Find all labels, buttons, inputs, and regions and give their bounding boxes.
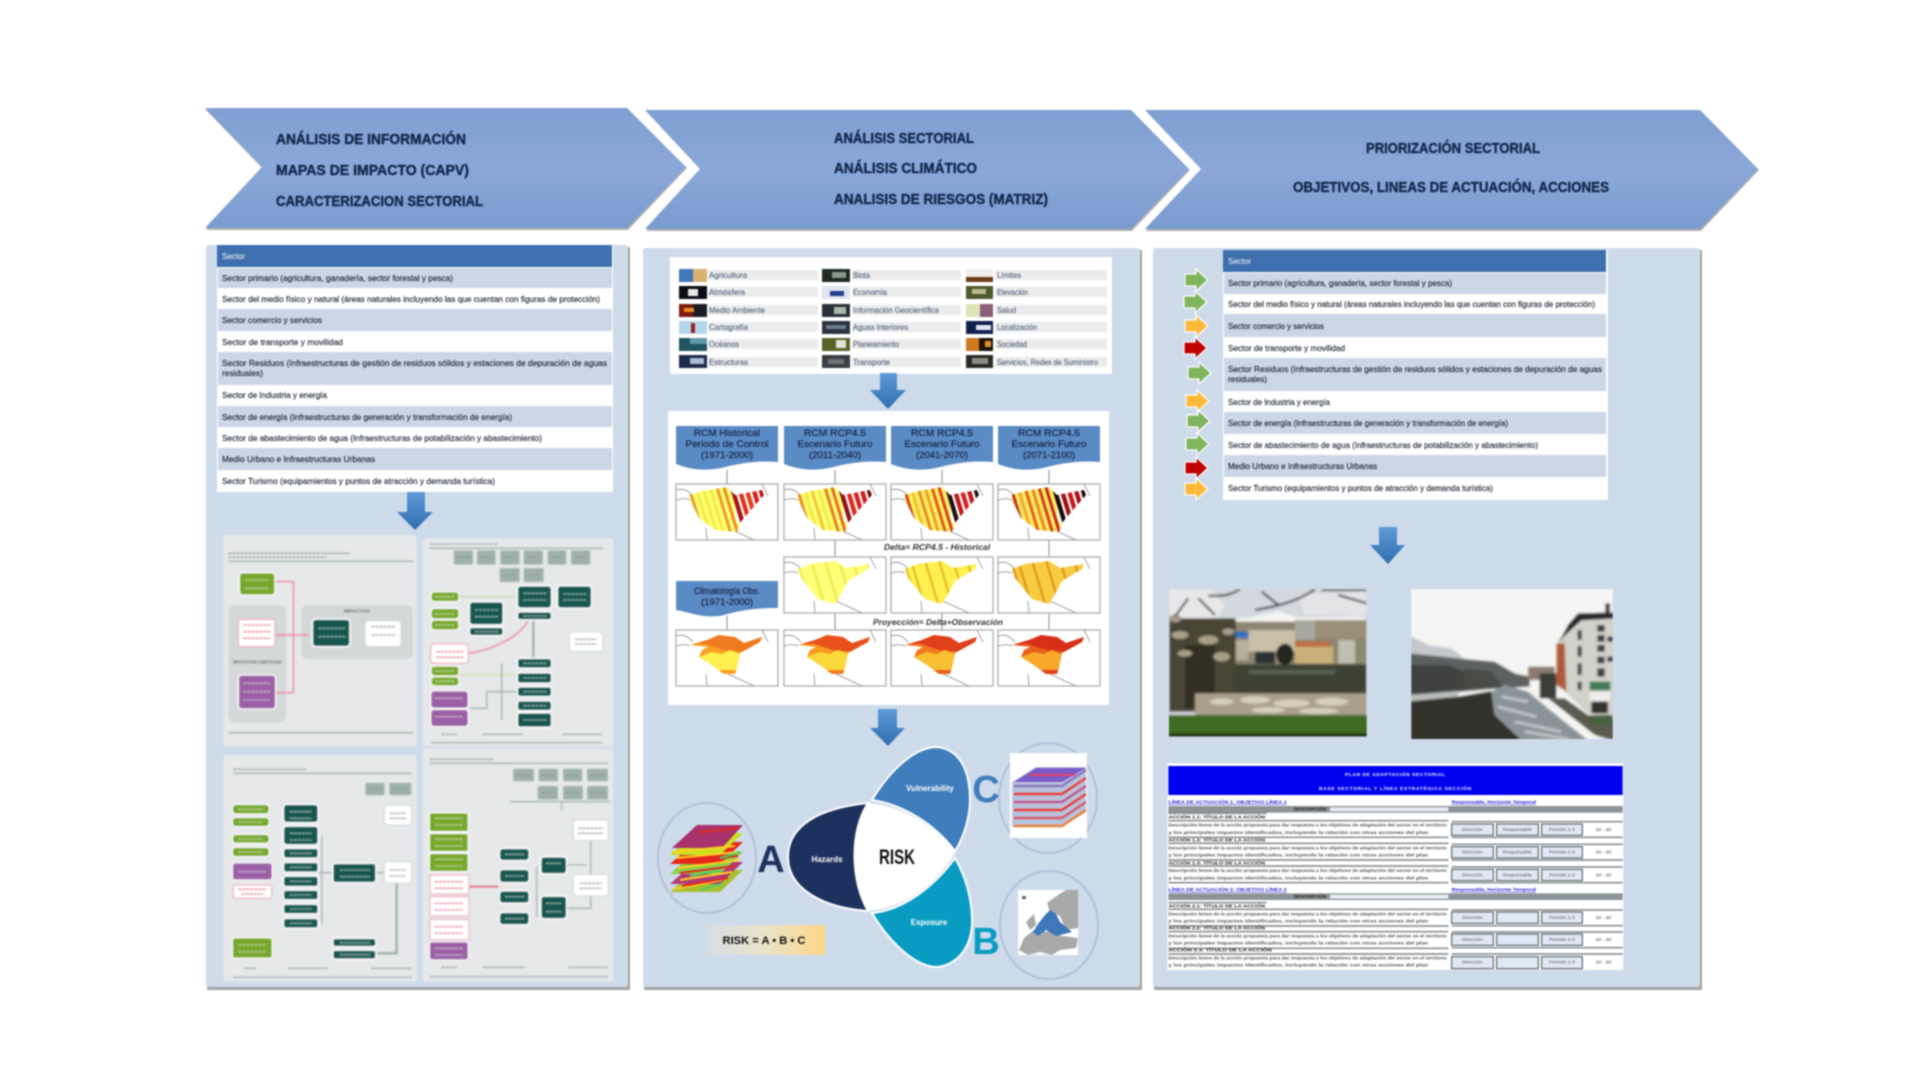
flow chart: bottom left [223,755,417,982]
action block 1: dd - dd [1596,827,1611,833]
sector table: Sector Residuos (Infraestructuras de gestión de residuos sólidos y estaciones de depuración de aguas [222,358,607,368]
risk diagram: A [757,839,785,881]
action block 1: Responsable [1503,850,1532,856]
prioritised sector table: Medio Urbano e Infraestructuras Urbanas [1228,461,1377,471]
action block 2 [1168,885,1623,969]
prioritised sector table: Sector de Industria y energía [1228,397,1330,407]
formula [707,925,825,955]
action block 2: Periodo 1-3 [1549,960,1575,966]
action block 2: dd - dd [1596,960,1611,966]
risk diagram: C [972,769,1000,811]
sector table: Sector primario (agricultura, ganadería, sector forestal y pesca) [222,273,453,283]
formula: RISK = A • B • C [722,935,806,947]
action block 1: Descripción breve de la acción propuesta para dar respuesta a los objetivos de adaptación del sector en el territorio [1168,823,1447,829]
sector table: Sector [222,252,245,261]
column headers: (2071-2100) [1023,449,1075,460]
topic category list: Agricultura [709,271,748,280]
sector table: Sector de energía (Infraestructuras de generación y transformación de energía) [222,412,512,422]
action block 1: Responsable [1503,827,1532,833]
sector table: Sector de abastecimiento de agua (Infraestructuras de potabilización y abastecimiento) [222,433,542,443]
action block 2: Dirección [1462,937,1483,943]
topic category list: Límites [997,271,1021,280]
action block 1: LÍNEA DE ACTUACIÓN 1: OBJETIVO LÍNEA 1 [1168,797,1287,805]
maps: delta row [784,557,1105,617]
action block 2: Descripción breve de la acción propuesta para dar respuesta a los objetivos de adaptación del sector en el territorio [1168,955,1447,961]
sector table: Sector comercio y servicios [222,315,322,325]
topic category list: Elevación [997,288,1028,297]
action block 2: y los principales impactos identificados, incluyendo la relación con otras acciones del plan [1168,963,1428,969]
column headers: Escenario Futuro [798,438,872,449]
column headers: Escenario Futuro [904,438,980,449]
action block 1: Descripción breve de la acción propuesta para dar respuesta a los objetivos de adaptación del sector en el territorio [1168,845,1447,851]
action block 2: ACCIÓN 2.2: TÍTULO DE LA ACCIÓN [1168,923,1265,931]
risk diagram: Vulnerability [906,784,954,793]
column headers: Escenario Futuro [1012,438,1086,449]
priority arrows [1184,269,1211,500]
action block 1: Dirección [1462,872,1483,878]
topic category list: Sociedad [997,340,1027,349]
topic category list [670,257,1112,374]
action block 1: ACCIÓN 1.1: TÍTULO DE LA ACCIÓN [1168,813,1265,821]
action block 1: y los principales impactos identificados, incluyendo la relación con otras acciones del plan [1168,875,1428,881]
flow chart: top right [423,538,613,747]
caption: projection: Proyección= Delta+Observación [873,617,1003,627]
action block 2: Descripción breve de la acción propuesta para dar respuesta a los objetivos de adaptación del sector en el territorio [1168,933,1447,939]
chevron: análisis sectorial: ANÁLISIS SECTORIAL [834,130,974,147]
flow chart: top left [223,535,417,747]
action block 1: Periodo 1-3 [1549,827,1575,833]
topic category list: Cartografía [709,323,749,332]
topic icons [679,269,993,368]
column headers: RCM RCP4.5 [911,427,973,438]
caption: delta: Delta= RCP4.5 - Historical [884,542,991,552]
action block 1: y los principales impactos identificados, incluyendo la relación con otras acciones del plan [1168,853,1428,859]
prioritised sector table: Sector de energía (Infraestructuras de generación y transformación de energía) [1228,418,1508,428]
column headers: (2011-2040) [809,449,861,460]
chevron: análisis sectorial: ANALISIS DE RIESGOS (MATRIZ) [834,192,1048,208]
chevron: análisis de información [205,108,687,230]
topic category list: Atmósfera [709,288,746,297]
prioritised sector table [1223,250,1608,500]
observed climatology header: (1971-2000) [701,596,753,607]
table title band [1168,766,1623,795]
sector table: Sector de transporte y movilidad [222,337,343,347]
action block 1: ACCIÓN 1.2: TÍTULO DE LA ACCIÓN [1168,835,1265,843]
table title band: PLAN DE ADAPTACIÓN SECTORIAL [1345,770,1445,778]
panel: análisis sectorial y climático [643,248,1142,990]
prioritised sector table: Sector [1228,257,1251,266]
topic category list: Salud [997,306,1016,315]
arrow: down to flow charts [397,492,433,530]
column headers: Periodo de Control [686,438,768,449]
action block 1: Periodo 1-3 [1549,872,1575,878]
action block 1: Periodo 1-3 [1549,850,1575,856]
prioritised sector table: Sector Residuos (Infraestructuras de gestión de residuos sólidos y estaciones de depuración de aguas [1228,364,1602,374]
action block 2: DESCRIPCIÓN [1294,892,1327,899]
action block 2: dd - dd [1596,937,1611,943]
flow chart: top left: IMPACTOS POR CLIMATOLOGÍA [233,657,282,665]
topic category list: Transporte [853,358,891,367]
prioritised sector table: Sector del medio físico y natural (áreas naturales incluyendo las que cuentan con figuras de protección) [1228,299,1595,309]
observed climatology header [676,581,778,616]
arrow: down to climate maps [870,373,906,409]
action block 1: Dirección [1462,850,1483,856]
chevron: priorización sectorial [1145,110,1759,231]
action block 1: y los principales impactos identificados, incluyendo la relación con otras acciones del plan [1168,830,1428,836]
action block 2: y los principales impactos identificados, incluyendo la relación con otras acciones del plan [1168,919,1428,925]
chevron: priorización sectorial: OBJETIVOS, LINEAS DE ACTUACIÓN, ACCIONES [1293,178,1609,196]
prioritised sector table: Sector de transporte y movilidad [1228,343,1345,353]
hazard layers image [658,803,756,913]
panel: análisis de información [206,245,630,990]
maps: projection row [676,630,1100,686]
topic category list: Aguas Interiores [853,323,908,332]
risk diagram: RISK [879,846,915,869]
photo: river and apartment block [1408,585,1616,742]
sector table: Medio Urbano e Infraestructuras Urbanas [222,454,375,464]
flow chart: bottom right [423,748,613,982]
chevron: priorización sectorial: PRIORIZACIÓN SECTORIAL [1366,139,1540,157]
risk diagram [757,747,1000,967]
sector table [217,245,613,492]
topic category list: Océanos [709,340,739,349]
sector table: residuales) [222,368,263,378]
chevron: análisis sectorial: ANÁLISIS CLIMÁTICO [834,160,977,177]
panel: priorización sectorial [1153,248,1702,990]
action block 1: Descripción breve de la acción propuesta para dar respuesta a los objetivos de adaptación del sector en el territorio [1168,868,1447,874]
chevron: análisis sectorial [645,110,1190,231]
prioritised sector table: Sector de abastecimiento de agua (Infraestructuras de potabilización y abastecimiento) [1228,440,1538,450]
topic category list: Planeamiento [853,340,900,349]
topic category list: Información Geocientífica [853,306,940,315]
action block 2: ACCIÓN 2.3: TÍTULO DE LA ACCIÓN [1168,946,1272,954]
prioritised sector table: Sector Turismo (equipamientos y puntos de atracción y demanda turística) [1228,483,1493,493]
exposure map of Europe [1000,871,1098,979]
action block 1: Responsable [1503,872,1532,878]
chevron: análisis de información: CARACTERIZACION SECTORIAL [276,194,483,210]
sector table: Sector del medio físico y natural (áreas naturales incluyendo las que cuentan con figuras de protección) [222,294,600,304]
arrow: down to risk diagram [870,709,905,746]
risk diagram: Hazards [811,855,843,864]
action block 2: ACCIÓN 2.1: TÍTULO DE LA ACCIÓN [1168,901,1265,909]
action table [1167,763,1623,970]
action block 1: Responsable, Horizonte Temporal [1452,799,1537,805]
chevron: análisis de información: MAPAS DE IMPACTO (CAPV) [276,163,469,179]
topic category list: Localización [997,323,1037,332]
topic category list: Economía [853,288,888,297]
climate map matrix [668,411,1109,705]
action block 1: dd - dd [1596,872,1611,878]
action block 2: y los principales impactos identificados, incluyendo la relación con otras acciones del plan [1168,941,1428,947]
action block 2: Periodo 1-3 [1549,937,1575,943]
action block 2: LÍNEA DE ACTUACIÓN 2: OBJETIVO LÍNEA 2 [1168,885,1287,893]
action block 2: dd - dd [1596,915,1611,921]
maps: historical and RCP4.5 row [676,484,1100,544]
table title band: BASE SECTORIAL Y LÍNEA ESTRATÉGICA SECCIÓN [1319,784,1472,792]
flow chart: top left: IMPACTOS [344,609,370,615]
arrow: down to photos [1370,527,1405,564]
column headers: (2041-2070) [916,449,968,460]
column headers: (1971-2000) [701,449,753,460]
column headers: RCM Historical [694,427,760,438]
risk diagram: Exposure [911,918,948,927]
photo: town and riverbank [1165,585,1372,742]
vulnerability layers image [999,743,1097,853]
action block 2: Dirección [1462,960,1483,966]
action block 2: Dirección [1462,915,1483,921]
action block 2: Descripción breve de la acción propuesta para dar respuesta a los objetivos de adaptación del sector en el territorio [1168,911,1447,917]
action block 2: Periodo 1-3 [1549,915,1575,921]
topic category list: Biota [853,271,871,280]
flow charts [223,535,613,982]
sector table: Sector de Industria y energía [222,390,327,400]
action block 1: ACCIÓN 1.3: TÍTULO DE LA ACCIÓN [1168,858,1265,866]
sector table: Sector Turismo (equipamientos y puntos de atracción y demanda turística) [222,476,495,486]
prioritised sector table: Sector primario (agricultura, ganadería, sector forestal y pesca) [1228,278,1452,288]
prioritised sector table: residuales) [1228,374,1267,384]
column headers: RCM RCP4.5 [1018,427,1080,438]
topic category list: Medio Ambiente [709,306,766,315]
observed climatology header: Climatología Obs. [694,585,760,596]
topic category list: Servicios, Redes de Suministro [997,358,1099,367]
column headers: RCM RCP4.5 [804,427,866,438]
action block 1: DESCRIPCIÓN [1294,805,1327,812]
action block 1: dd - dd [1596,850,1611,856]
action block 1 [1168,797,1623,883]
topic category list: Estructuras [709,358,748,367]
prioritised sector table: Sector comercio y servicios [1228,321,1324,331]
action block 2: Responsable, Horizonte Temporal [1452,887,1537,893]
risk diagram: B [972,921,1000,963]
action block 1: Dirección [1462,827,1483,833]
chevron: análisis de información: ANÁLISIS DE INFORMACIÓN [276,130,466,148]
column headers [676,426,1100,470]
